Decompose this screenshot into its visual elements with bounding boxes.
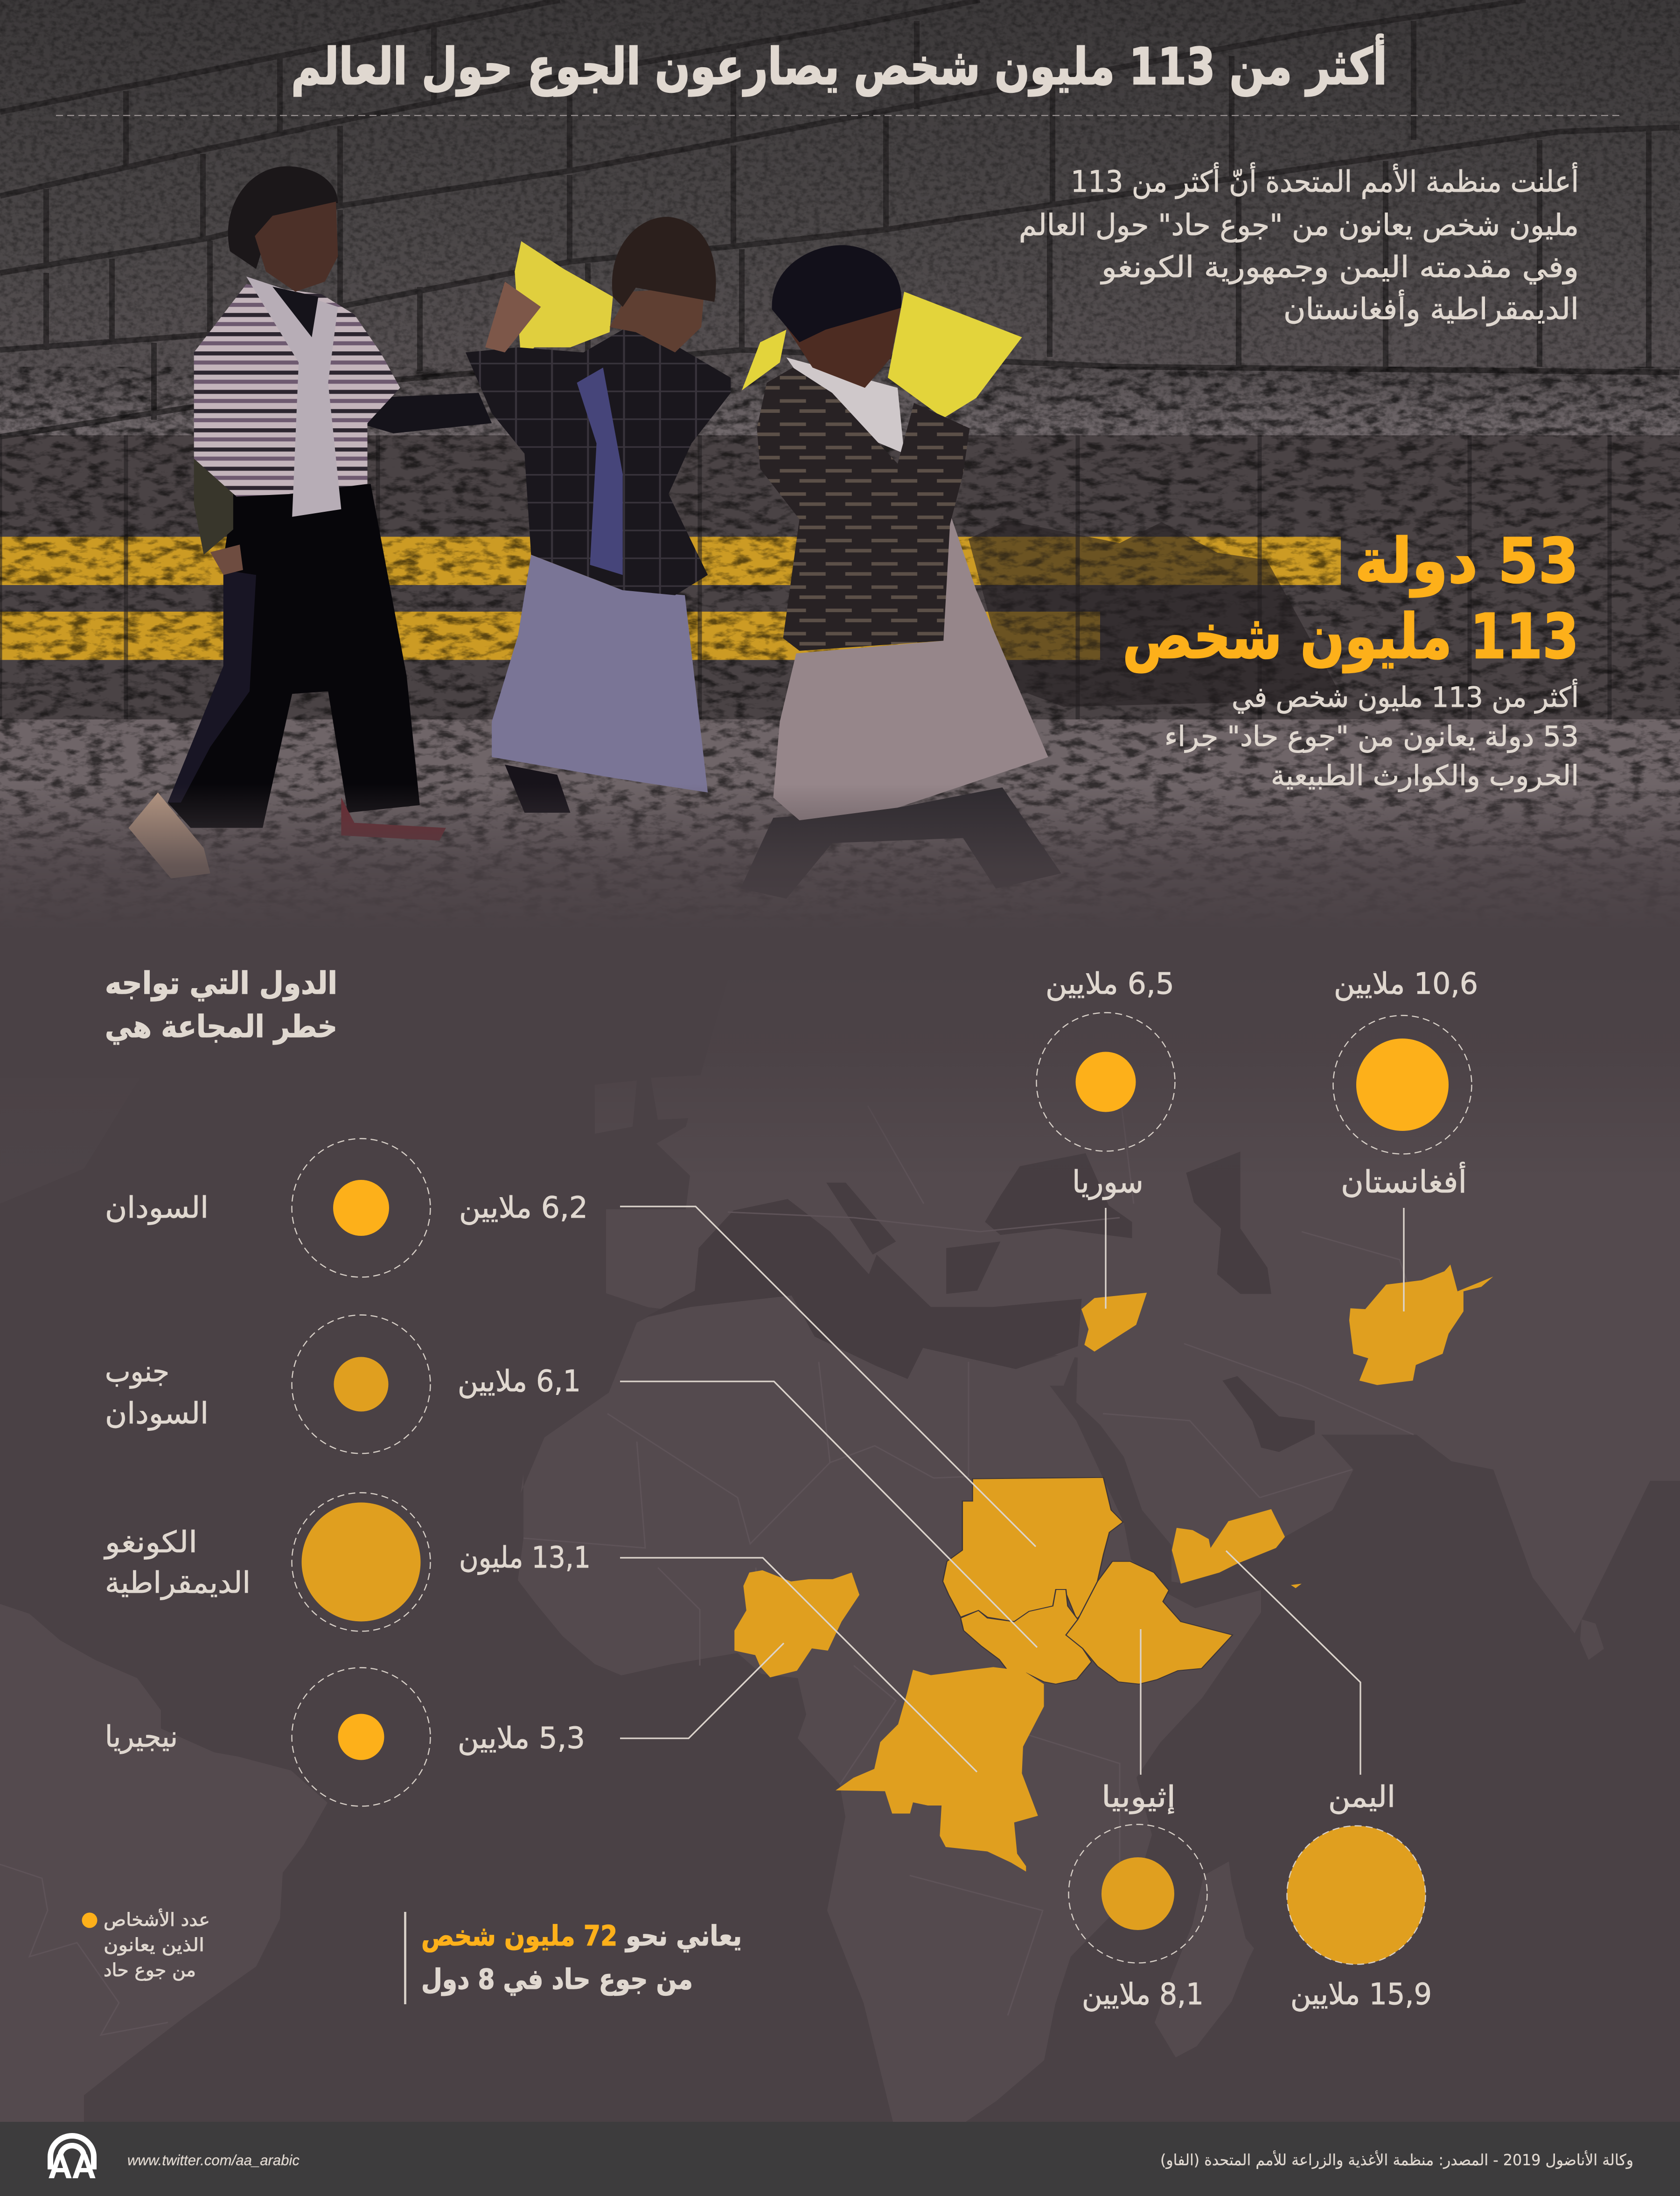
country: Nigeria (734, 1570, 859, 1677)
item: Nigeria: 5,3 ملايين (458, 1721, 585, 1756)
title divider (56, 115, 1621, 116)
item: Afghanistan: 10,6 ملايين (1334, 967, 1478, 1001)
leader: Ethiopia (1140, 1629, 1141, 1775)
icon: Anadolu Agency logo: AA (49, 2148, 96, 2185)
hero photo: children carrying food bags (0, 0, 1680, 931)
item: Nigeria: نيجيريا (105, 1720, 178, 1754)
country: Yemen (1172, 1509, 1285, 1584)
item: DR Congo (104, 1493, 591, 1631)
world map (0, 938, 1680, 2122)
footer bar (0, 2122, 1680, 2196)
footer source: وكالة الأناضول 2019 - المصدر: منظمة الأغذية والزراعة للأمم المتحدة (الفاو) (1160, 2150, 1633, 2169)
item: South Sudan: السودان (105, 1396, 209, 1431)
Mediterranean (646, 1199, 1082, 1379)
item: South Sudan: جنوب (105, 1354, 169, 1389)
leader lines (620, 1206, 1404, 1775)
northern map fade (0, 938, 1680, 1183)
item: Yemen: 15,9 ملايين (1290, 1977, 1432, 2012)
boy with bag right (740, 245, 1061, 899)
seas overlay (646, 1151, 1271, 1379)
girl (128, 166, 492, 878)
country: Syria (1081, 1293, 1147, 1352)
Caspian (1186, 1151, 1271, 1294)
item: Nigeria (105, 1667, 585, 1806)
heading: countries at risk: خطر المجاعة هي (105, 1009, 337, 1045)
children figures (128, 166, 1061, 899)
country: Afghanistan (1349, 1264, 1493, 1385)
band joints (0, 434, 1610, 719)
stat description: 53 دولة يعانون من "جوع حاد" جراء (1164, 720, 1579, 753)
item: Sudan: 6,2 ملايين (459, 1191, 588, 1225)
leader: Nigeria (620, 1643, 784, 1738)
item: Syria: سوريا (1072, 1164, 1143, 1200)
item: DR Congo: 13,1 مليون (459, 1541, 591, 1575)
boy with bag middle (466, 217, 731, 813)
yellow stripe top (0, 537, 1341, 585)
band and ground texture (0, 367, 1680, 927)
footer website: www.twitter.com/aa_arabic (127, 2152, 300, 2168)
intro paragraph: مليون شخص يعانون من "جوع حاد" حول العالم (1019, 208, 1579, 243)
item: Afghanistan (1333, 967, 1478, 1200)
item: South Sudan (105, 1315, 581, 1454)
title: أكثر من 113 مليون شخص يصارعون الجوع حول العالم (291, 34, 1387, 97)
country: DR Congo (836, 1667, 1044, 1872)
big stat: 53 countries: 53 دولة (1355, 525, 1579, 598)
land masses (0, 980, 1680, 2122)
legend: من جوع حاد (104, 1960, 196, 1981)
leader: DR Congo (620, 1558, 977, 1772)
heading: countries at risk (105, 965, 337, 1045)
intro paragraph: أعلنت منظمة الأمم المتحدة أنّ أكثر من 113 (1071, 162, 1579, 199)
Adriatic (826, 1183, 896, 1255)
item: Ethiopia (1069, 1780, 1207, 2012)
Persian Gulf (1222, 1376, 1315, 1452)
country: South Sudan (961, 1589, 1092, 1684)
callout: من جوع حاد في 8 دول (421, 1963, 693, 1996)
item: Ethiopia: إثيوبيا (1101, 1780, 1176, 1814)
item: DR Congo: الديمقراطية (105, 1566, 251, 1600)
callout (405, 1912, 742, 2004)
right shadows (969, 521, 1344, 707)
item: Syria (1037, 967, 1175, 1200)
item: Sudan (105, 1138, 588, 1277)
band background (0, 435, 1680, 719)
legend: عدد الأشخاص (104, 1908, 210, 1931)
wall background (0, 0, 1680, 437)
item: Yemen (1287, 1780, 1432, 2012)
Black Sea (985, 1153, 1132, 1238)
item: Syria: 6,5 ملايين (1046, 967, 1174, 1001)
stat description: الحروب والكوارث الطبيعية (1271, 760, 1579, 792)
stat description: أكثر من 113 مليون شخص في (1232, 679, 1579, 714)
item: Afghanistan: أفغانستان (1341, 1162, 1467, 1200)
leader: Afghanistan (1403, 1208, 1404, 1311)
leader: Sudan (620, 1206, 1036, 1547)
item: Ethiopia: 8,1 ملايين (1082, 1977, 1204, 2012)
country borders (0, 1092, 1428, 2035)
leader: Yemen (1226, 1551, 1360, 1775)
ground background (0, 719, 1680, 929)
big stat: 113 million: 113 مليون شخص (1122, 601, 1579, 673)
intro paragraph: وفي مقدمته اليمن وجمهورية الكونغو (1100, 250, 1579, 285)
wall grain (0, 0, 1680, 437)
wall joints (0, 0, 1680, 437)
legend (82, 1908, 210, 1981)
item: South Sudan: 6,1 ملايين (458, 1364, 581, 1399)
intro paragraph (1019, 162, 1579, 327)
heading: countries at risk: الدول التي تواجه (105, 965, 337, 1002)
leader: South Sudan (620, 1381, 1037, 1647)
stat description (1164, 679, 1579, 792)
country: Sudan (943, 1478, 1123, 1622)
country: Socotra (1291, 1584, 1302, 1588)
item: DR Congo: الكونغو (104, 1525, 197, 1560)
bottom fade (0, 784, 1680, 931)
Aegean (946, 1241, 1000, 1294)
intro paragraph: الديمقراطية وأفغانستان (1283, 290, 1579, 327)
yellow stripe bottom (0, 612, 1100, 660)
legend: الذين يعانون (104, 1935, 204, 1956)
callout: يعاني نحو 72 مليون شخص (421, 1920, 742, 1952)
item: Yemen: اليمن (1328, 1780, 1395, 1814)
item: Sudan: السودان (105, 1191, 209, 1225)
highlighted countries (734, 1264, 1493, 1872)
leader: Syria (1105, 1208, 1106, 1309)
country: Ethiopia (1066, 1562, 1233, 1684)
